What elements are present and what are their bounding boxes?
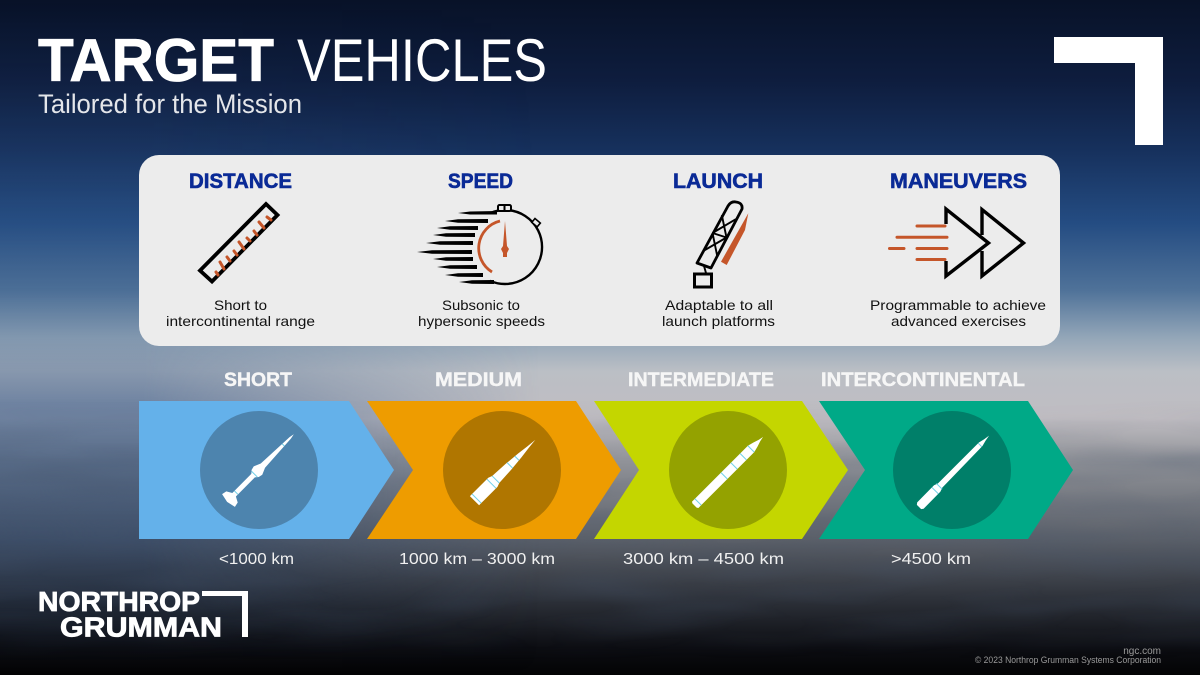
capability: launch: Adaptable to all — [665, 297, 773, 313]
capability: launch: launch platforms — [662, 313, 775, 329]
title: TARGET — [38, 27, 274, 94]
capability: speed — [417, 170, 545, 329]
capability: launch: LAUNCH — [673, 170, 763, 193]
capability: distance — [166, 170, 315, 329]
capability: distance: Short to — [214, 297, 267, 313]
corner bracket mark — [1054, 37, 1163, 145]
range: short — [139, 370, 394, 568]
range: short: SHORT — [224, 370, 292, 391]
title: VEHICLES — [297, 27, 547, 94]
capability: speed: Subsonic to — [442, 297, 520, 313]
capability: speed: hypersonic speeds — [418, 313, 545, 329]
capability: distance: DISTANCE — [189, 170, 292, 193]
range: intermediate: INTERMEDIATE — [628, 370, 774, 391]
footer credits: © 2023 Northrop Grumman Systems Corporation — [975, 655, 1161, 665]
capability: maneuvers: advanced exercises — [891, 313, 1026, 329]
capability: maneuvers — [870, 170, 1046, 329]
range: short: <1000 km — [219, 551, 294, 568]
logo: Northrop Grumman — [38, 586, 248, 642]
logo: Northrop Grumman: GRUMMAN — [60, 612, 222, 642]
title — [38, 27, 547, 94]
icon: medium range missile — [470, 435, 540, 505]
capability: distance: intercontinental range — [166, 313, 315, 329]
capability: maneuvers: Programmable to achieve — [870, 297, 1046, 313]
icon: intermediate range missile — [691, 434, 766, 509]
range: intercontinental: INTERCONTINENTAL — [821, 370, 1025, 391]
range: intercontinental: >4500 km — [891, 551, 971, 568]
capability: speed: SPEED — [448, 170, 513, 193]
range: intercontinental — [819, 370, 1073, 568]
footer credits: ngc.com — [1123, 646, 1161, 657]
range: medium: MEDIUM — [435, 370, 522, 391]
range: medium: 1000 km – 3000 km — [399, 551, 555, 568]
panel: capabilities — [139, 155, 1060, 346]
range: intermediate: 3000 km – 4500 km — [623, 551, 784, 568]
icon: intercontinental range missile — [916, 433, 992, 510]
range: intermediate — [594, 370, 848, 568]
subtitle: Tailored for the Mission — [38, 89, 302, 119]
capability: launch — [662, 170, 775, 329]
capability: maneuvers: MANEUVERS — [890, 170, 1027, 193]
footer credits — [975, 646, 1161, 665]
range: medium — [367, 370, 621, 568]
icon: short range missile — [221, 428, 300, 508]
logo: Northrop Grumman: NORTHROP — [38, 586, 200, 617]
